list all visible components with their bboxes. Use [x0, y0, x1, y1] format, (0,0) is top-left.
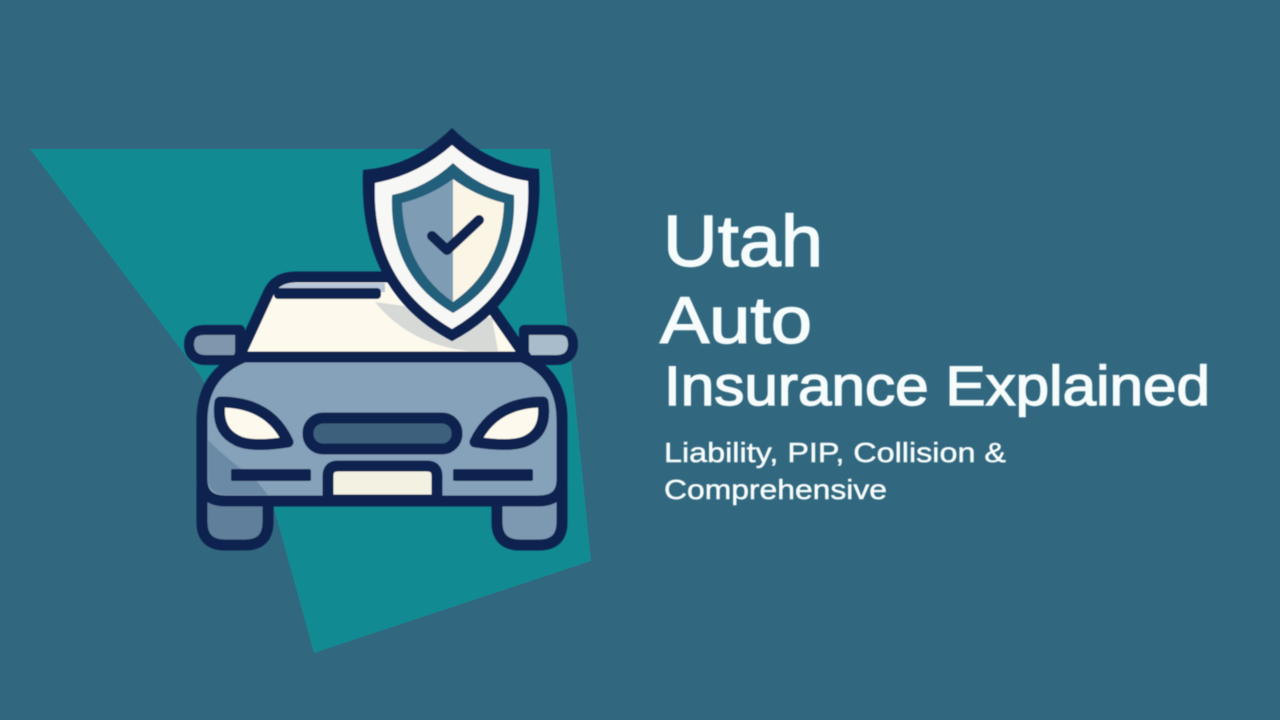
left headlight	[219, 402, 288, 445]
subtitle: Liability, PIP, Collision &	[664, 437, 1006, 468]
left wheel	[202, 490, 268, 545]
subtitle: Comprehensive	[664, 474, 887, 505]
shield left half	[402, 179, 453, 302]
shield right half	[453, 179, 504, 302]
right headlight	[475, 402, 544, 445]
icon: car front view	[189, 277, 573, 545]
windshield top highlight	[276, 283, 385, 292]
right bumper bar	[453, 469, 533, 481]
windshield shade band	[274, 288, 381, 299]
teal angular backdrop shape	[30, 149, 591, 653]
title	[660, 202, 1210, 417]
left bumper bar	[231, 469, 311, 481]
windshield shield shadow	[375, 302, 498, 351]
right wheel	[497, 490, 562, 545]
car body	[202, 357, 562, 501]
left mirror	[189, 330, 240, 360]
title: Auto	[660, 283, 812, 357]
grille	[308, 418, 457, 449]
outer shield	[363, 128, 539, 341]
title: Utah	[663, 202, 823, 282]
check mark	[432, 220, 479, 250]
subtitle	[664, 437, 1006, 505]
white rim	[375, 145, 528, 329]
title: Insurance Explained	[664, 354, 1210, 417]
license plate	[328, 466, 437, 500]
icon: shield with check	[363, 128, 539, 341]
body shadow	[208, 440, 268, 495]
windshield	[239, 277, 526, 357]
right mirror	[524, 330, 573, 360]
teal ring	[392, 163, 514, 313]
